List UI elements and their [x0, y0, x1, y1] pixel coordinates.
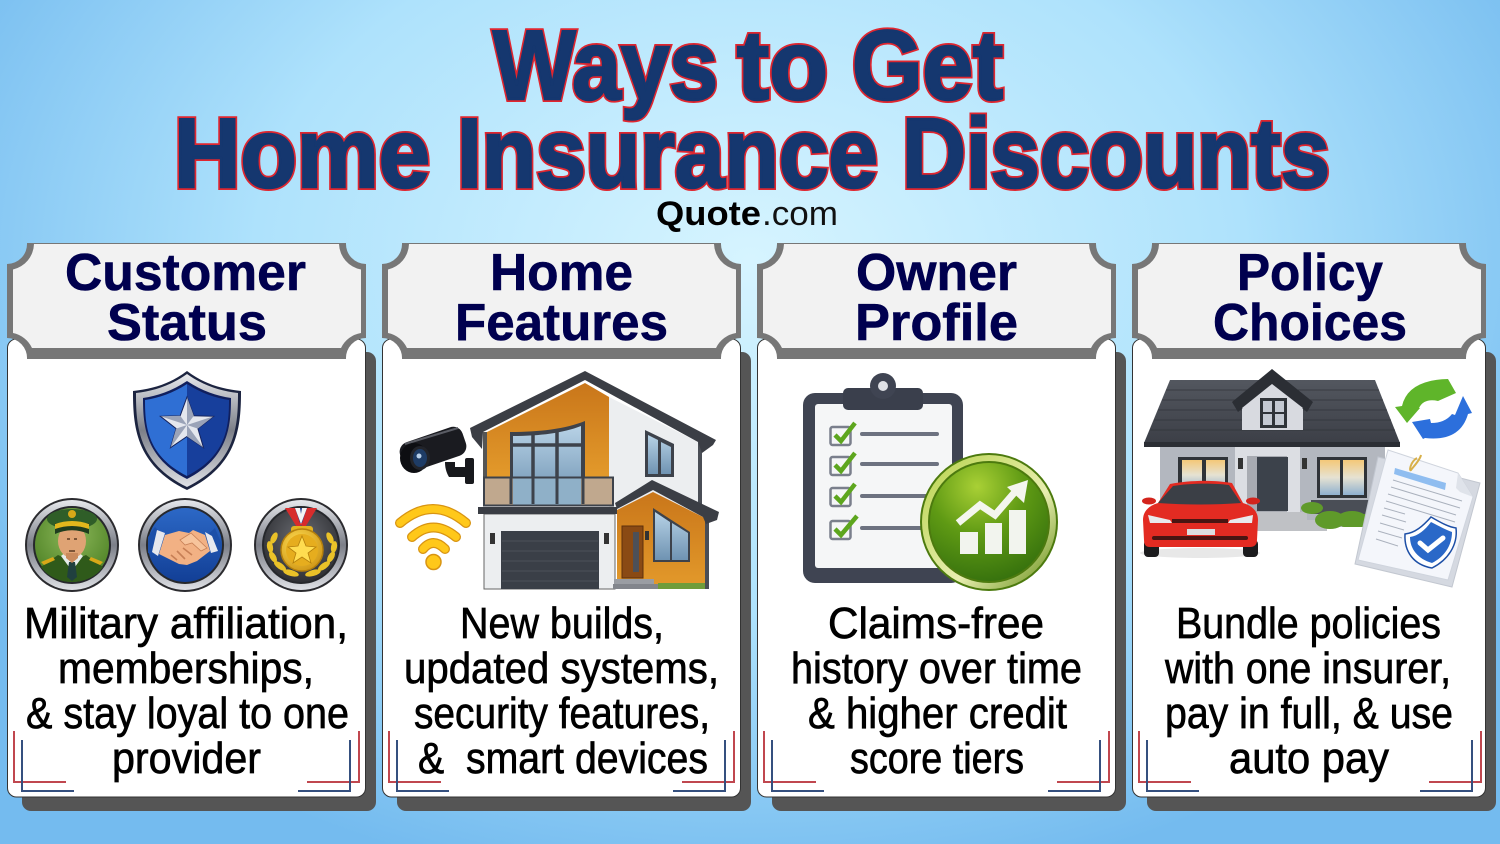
icon: policy document with shield — [1355, 450, 1480, 587]
title: to — [737, 10, 828, 120]
title: Discounts — [902, 98, 1330, 208]
header: policy choices: Choices — [1213, 294, 1407, 352]
header: owner profile: Owner — [856, 244, 1017, 302]
header: customer status — [7, 243, 366, 359]
icon: suburban house — [1144, 369, 1400, 531]
title: Discounts — [902, 98, 1330, 208]
logo: Quote.com — [656, 195, 838, 233]
body text: owner profile: score tiers — [850, 734, 1024, 783]
title: Ways — [493, 10, 718, 120]
body text: customer status: memberships, — [58, 644, 314, 693]
title: Insurance — [457, 98, 878, 208]
body text: owner profile: history over time — [791, 644, 1082, 693]
icon: wifi signal — [400, 509, 466, 570]
icon: handshake — [138, 498, 232, 592]
body text: customer status: Military affiliation, — [24, 599, 348, 648]
body text: customer status — [24, 599, 349, 783]
title: Insurance — [457, 98, 878, 208]
header: customer status: Customer — [65, 244, 306, 302]
header: home features: Features — [455, 294, 668, 352]
header: policy choices: Policy — [1237, 244, 1383, 302]
title: Get — [852, 10, 1003, 120]
logo: Quote.com: Quote — [656, 195, 761, 233]
logo: Quote.com: .com — [762, 195, 838, 233]
header: customer status: Status — [107, 294, 267, 352]
header: home features: Home — [490, 244, 633, 302]
title: Home — [174, 98, 430, 208]
icon: security camera — [397, 424, 474, 484]
header: policy choices — [1132, 243, 1486, 359]
body text: policy choices: Bundle policies — [1176, 599, 1441, 648]
icon: green growth badge — [920, 453, 1058, 591]
icon: red car — [1140, 481, 1260, 558]
body text: home features: updated systems, — [404, 644, 719, 693]
body text: policy choices: auto pay — [1229, 734, 1389, 783]
body text: home features: & smart devices — [418, 734, 708, 783]
title: Get — [852, 10, 1003, 120]
body text: customer status: & stay loyal to one — [26, 689, 349, 738]
body text: owner profile: Claims-free — [828, 599, 1044, 648]
body text: customer status: provider — [112, 734, 261, 783]
icon: renewal arrows — [1395, 379, 1472, 439]
body text: policy choices: pay in full, & use — [1165, 689, 1453, 738]
icon: clipboard checklist — [803, 373, 963, 583]
title — [174, 10, 1330, 208]
body text: home features — [404, 599, 719, 783]
body text: policy choices: with one insurer, — [1164, 644, 1451, 693]
body text: owner profile: & higher credit — [808, 689, 1067, 738]
header: home features — [382, 243, 741, 359]
panel: home features — [382, 243, 751, 811]
panel: owner profile — [757, 243, 1126, 811]
icon: shield with star — [133, 371, 241, 490]
header: owner profile: Profile — [855, 294, 1018, 352]
body text: policy choices — [1164, 599, 1453, 783]
body text: home features: New builds, — [460, 599, 664, 648]
panel: customer status — [7, 243, 376, 811]
title: Ways — [493, 10, 718, 120]
body text: owner profile — [791, 599, 1082, 783]
title: Home — [174, 98, 430, 208]
icon: modern house — [470, 371, 719, 589]
title: to — [737, 10, 828, 120]
icon: military officer — [25, 498, 119, 592]
body text: home features: security features, — [414, 689, 710, 738]
panel: policy choices — [1132, 243, 1496, 811]
header: owner profile — [757, 243, 1116, 359]
icon: gold medal — [254, 498, 348, 592]
